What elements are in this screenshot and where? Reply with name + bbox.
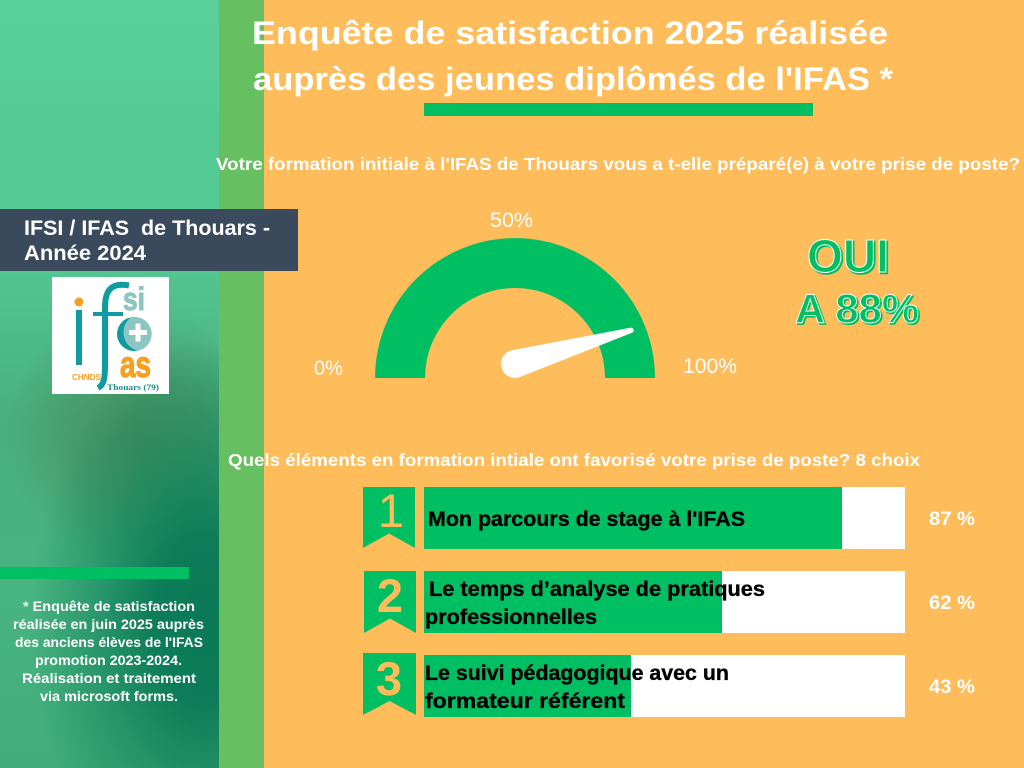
footnote text xyxy=(13,598,204,704)
chart: gauge at 88% xyxy=(375,238,655,378)
ribbon 3: 3 xyxy=(376,652,402,705)
row 1: Mon parcours de stage xyxy=(363,484,975,549)
title: auprès des jeunes diplômés de l'IFAS * xyxy=(253,61,894,97)
value 62%: 62 % xyxy=(929,593,975,614)
bar 2 xyxy=(424,571,905,633)
callout: OUI à 88% xyxy=(795,230,920,333)
panel: green vertical strip xyxy=(219,0,264,768)
bar 2: professionnelles xyxy=(425,606,597,629)
footnote text: Réalisation et traitement xyxy=(22,670,196,686)
bar 1 xyxy=(424,487,905,549)
bar 2: Le temps d’analyse de pratiques xyxy=(429,578,765,601)
ribbon 3 xyxy=(363,652,416,715)
footnote text: promotion 2023-2024. xyxy=(35,652,182,668)
heading: question 2: Quels éléments en formation intiale ont favorisé votre prise de poste? 8 choix xyxy=(228,450,920,470)
logo: IFSI IFAS: si xyxy=(123,281,145,317)
ribbon 2: 2 xyxy=(377,569,403,622)
row 2: analyse de pratiques xyxy=(364,569,975,633)
logo: IFSI IFAS: Thouars (79) xyxy=(107,383,159,392)
value 87%: 87 % xyxy=(929,509,975,530)
logo: IFSI IFAS: CHNDS xyxy=(72,373,102,382)
footnote divider bar xyxy=(0,567,189,579)
ribbon 1: 1 xyxy=(378,484,404,537)
logo: IFSI IFAS: as xyxy=(120,344,151,385)
callout: OUI à 88%: OUI xyxy=(807,230,889,282)
panel: left gradient sidebar xyxy=(0,0,219,768)
title: Enquête de satisfaction 2025 réalisée xyxy=(252,15,888,51)
row 3: suivi pédagogique xyxy=(363,652,975,717)
logo: IFSI IFAS xyxy=(52,277,169,394)
footnote text: des anciens élèves de l'IFAS xyxy=(15,634,203,650)
gauge needle xyxy=(501,328,634,378)
title underline bar xyxy=(424,103,813,116)
value 43%: 43 % xyxy=(929,677,975,698)
footnote text: via microsoft forms. xyxy=(40,688,178,704)
bar 3 xyxy=(424,655,905,717)
gauge label: 100%: 100% xyxy=(683,355,737,378)
footnote text: réalisée en juin 2025 auprès xyxy=(13,616,204,632)
banner: institution and year: Année 2024 xyxy=(24,242,146,265)
footnote text: * Enquête de satisfaction xyxy=(23,598,195,614)
callout: OUI à 88%: A 88% xyxy=(796,287,920,333)
banner: institution and year xyxy=(0,209,298,271)
banner: institution and year: IFSI / IFAS de Thouars - xyxy=(24,217,270,240)
callout: OUI à 88%: OUI xyxy=(808,232,890,284)
heading: question 1: Votre formation initiale à l'IFAS de Thouars vous a t-elle préparé(e) à votre prise de poste? xyxy=(216,154,1020,174)
gauge label: 0%: 0% xyxy=(314,357,343,380)
callout: OUI à 88%: A 88% xyxy=(795,286,919,332)
ribbon 1 xyxy=(363,484,415,548)
ribbon 2 xyxy=(364,569,416,633)
bar 3: Le suivi pédagogique avec un xyxy=(425,662,729,685)
bar 3: formateur référent xyxy=(425,690,625,713)
title xyxy=(252,15,894,97)
bar 1: Mon parcours de stage à l'IFAS xyxy=(428,508,745,531)
gauge label: 50%: 50% xyxy=(490,208,533,232)
